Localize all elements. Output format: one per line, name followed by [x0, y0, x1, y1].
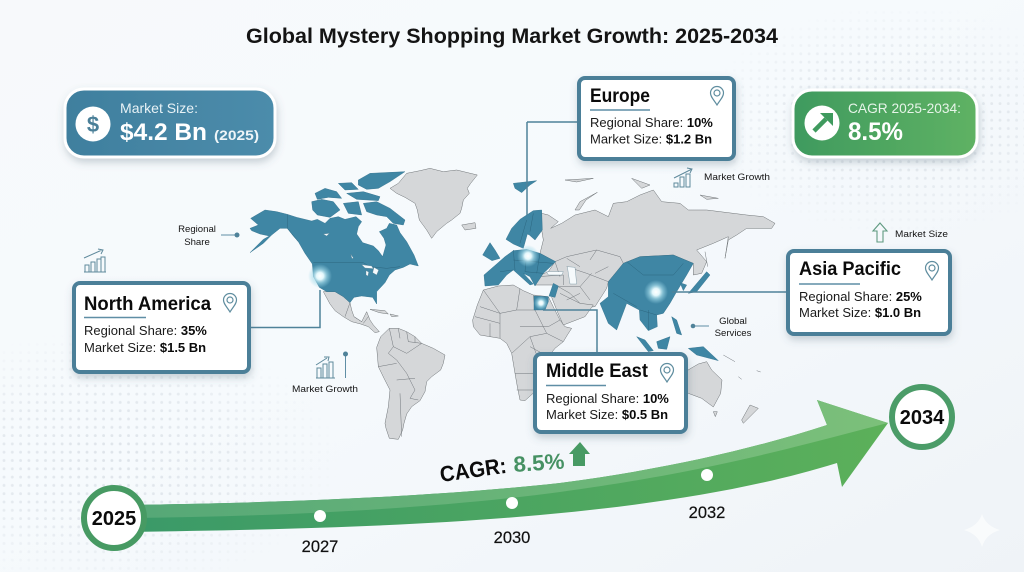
panel: North America: [74, 283, 249, 372]
annotation: Regional Share: [178, 224, 240, 248]
CAGR growth label: 8.5%: [513, 448, 565, 477]
map glow: Middle East: [534, 296, 548, 310]
market size pill: [65, 89, 275, 157]
map: Europe, Africa, Asia, Oceania: [473, 178, 775, 423]
Middle East size: Market Size: $0.5 Bn: [546, 407, 668, 422]
map glow: Asia Pacific: [644, 280, 668, 304]
market size value: $4.2 Bn: [120, 119, 207, 146]
connector lines: [251, 122, 786, 352]
annotation: Market Growth lower: Market Growth: [292, 384, 358, 395]
icon: pin: [710, 86, 724, 105]
world map: [250, 168, 775, 439]
heading: Europe: Europe: [590, 86, 650, 107]
icon: dollar: $: [87, 112, 99, 137]
Europe share: Regional Share: 10%: [590, 115, 713, 130]
annotation: Market Size: Market Size: [895, 229, 948, 240]
icon: dollar: [76, 106, 110, 142]
annotation: Global Services: Services: [715, 328, 752, 339]
annotation: Global Services: [691, 316, 752, 339]
annotation: Market Size: [873, 223, 948, 242]
panel: Asia Pacific: [788, 251, 950, 334]
icon: growth arrow: [804, 106, 840, 140]
icon: up arrow: [569, 442, 590, 466]
timeline dot 2027: [314, 510, 326, 522]
market size year: (2025): [214, 127, 259, 143]
CAGR pill: [793, 90, 977, 157]
heading: Middle East: Middle East: [546, 361, 649, 382]
annotation: Market Growth lower: [292, 352, 358, 395]
annotation: Market Growth upper: Market Growth: [704, 172, 770, 183]
node: 2034: 2034: [900, 407, 945, 429]
map: Americas and Greenland: [250, 168, 477, 439]
Asia Pacific size: Market Size: $1.0 Bn: [799, 305, 921, 320]
panel: Europe: [579, 78, 734, 159]
title: Global Mystery Shopping Market Growth: 2025-2034: [246, 25, 778, 48]
map glow: Europe: [517, 245, 539, 267]
map glow: North America: [308, 264, 332, 288]
annotation: Regional Share: Share: [184, 237, 210, 248]
annotation: Market Growth upper: [674, 168, 770, 187]
Europe size: Market Size: $1.2 Bn: [590, 132, 712, 146]
icon: growth chart left: [84, 249, 106, 272]
year 2030: 2030: [494, 529, 530, 547]
node: 2034: [892, 387, 952, 447]
North America size: Market Size: $1.5 Bn: [84, 340, 206, 355]
market size label: Market Size:: [120, 100, 198, 116]
heading: North America: North America: [84, 294, 211, 315]
node: 2025: [84, 488, 144, 548]
CAGR value: 8.5%: [848, 118, 903, 146]
timeline dot 2032: [701, 469, 713, 481]
icon: pin: [224, 294, 236, 312]
CAGR growth label: CAGR:: [438, 453, 508, 487]
icon: pin: [660, 364, 674, 382]
panel: Middle East: [535, 354, 686, 432]
Asia Pacific share: Regional Share: 25%: [799, 289, 922, 304]
Middle East share: Regional Share: 10%: [546, 391, 669, 406]
icon: pin: [926, 262, 938, 280]
timeline dot 2030: [506, 497, 518, 509]
heading: Asia Pacific: Asia Pacific: [799, 259, 901, 280]
CAGR growth label: [438, 442, 590, 487]
year 2027: 2027: [302, 538, 338, 556]
CAGR label: CAGR 2025-2034:: [848, 100, 961, 116]
North America share: Regional Share: 35%: [84, 323, 207, 338]
annotation: Global Services: Global: [719, 316, 747, 327]
growth arrow timeline: [120, 400, 888, 532]
year 2032: 2032: [689, 504, 725, 522]
node: 2025: 2025: [92, 508, 136, 530]
annotation: Regional Share: Regional: [178, 224, 216, 235]
